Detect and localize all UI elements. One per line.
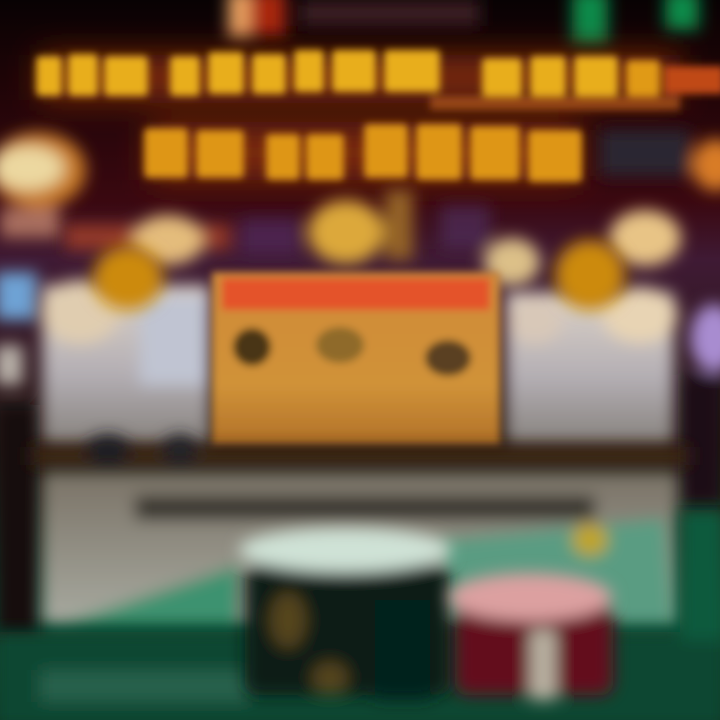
title glow (40, 55, 680, 180)
center header (222, 278, 490, 310)
icon: dot 2 (316, 327, 364, 363)
icon: small gold marker (572, 524, 608, 556)
chips: green stack (239, 528, 451, 700)
edge lights (0, 272, 720, 640)
panel: left (40, 280, 210, 445)
top lights (228, 0, 699, 44)
center coin (308, 200, 384, 264)
panel: center (212, 272, 500, 446)
upper decorations (65, 190, 681, 286)
chip tops (239, 528, 451, 572)
side lamps (0, 130, 720, 238)
lower green area (60, 565, 240, 625)
red chip top (448, 573, 612, 621)
title (36, 50, 720, 182)
icon: right gold coin (555, 240, 625, 310)
icon: dot 3 (425, 340, 471, 376)
divider band (30, 435, 690, 465)
lower dark bar (135, 496, 595, 520)
icon: left gold coin (93, 246, 163, 310)
panel: right (506, 287, 678, 445)
table (0, 510, 720, 720)
icon: dot 1 (233, 328, 271, 366)
title line 2 (144, 124, 582, 182)
chips: red stack (448, 573, 613, 700)
panel: lower (42, 472, 678, 625)
title line 1 (36, 50, 720, 110)
